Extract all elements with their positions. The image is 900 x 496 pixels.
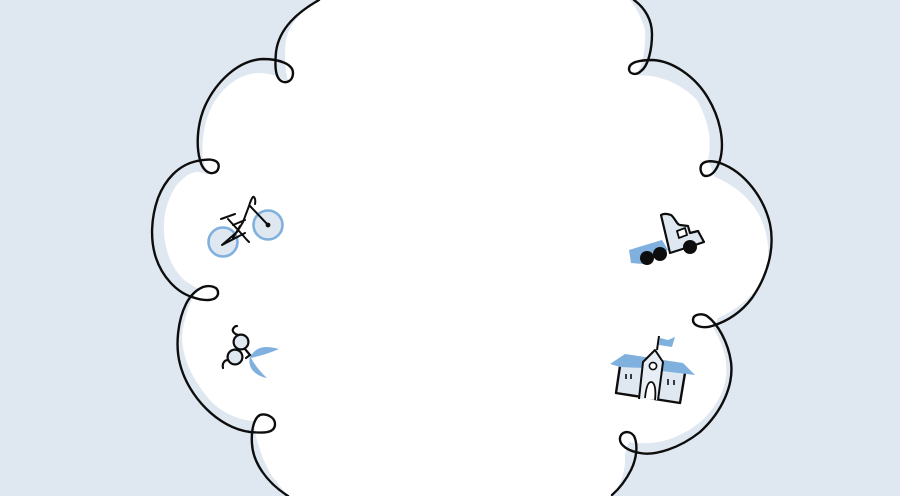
- bike frame: [221, 197, 268, 245]
- icon: bicycle: [208, 197, 282, 256]
- school windows: [626, 374, 674, 385]
- flagpole: [657, 336, 659, 350]
- icon: glasses and bow: [223, 326, 279, 378]
- blue bow: [249, 347, 279, 378]
- rear wheel: [208, 228, 238, 256]
- truck wheels: [640, 251, 654, 265]
- school roof: [610, 354, 695, 375]
- tower window: [649, 362, 657, 370]
- glasses temples and bridge: [223, 326, 250, 368]
- front wheel: [254, 210, 282, 240]
- glasses: [228, 335, 248, 364]
- truck bed: [629, 240, 668, 264]
- front hub: [266, 223, 270, 227]
- cloud outline with loops: [152, 0, 319, 496]
- truck cab: [661, 214, 704, 253]
- icon: truck: [629, 214, 704, 265]
- cloud outline right with loops: [612, 0, 772, 495]
- truck window: [677, 228, 687, 238]
- white cloud interior: [164, 0, 768, 496]
- school tower: [639, 350, 663, 400]
- flag: [659, 337, 675, 347]
- icon: school building: [610, 336, 695, 403]
- school door: [645, 382, 655, 400]
- school body: [616, 366, 685, 403]
